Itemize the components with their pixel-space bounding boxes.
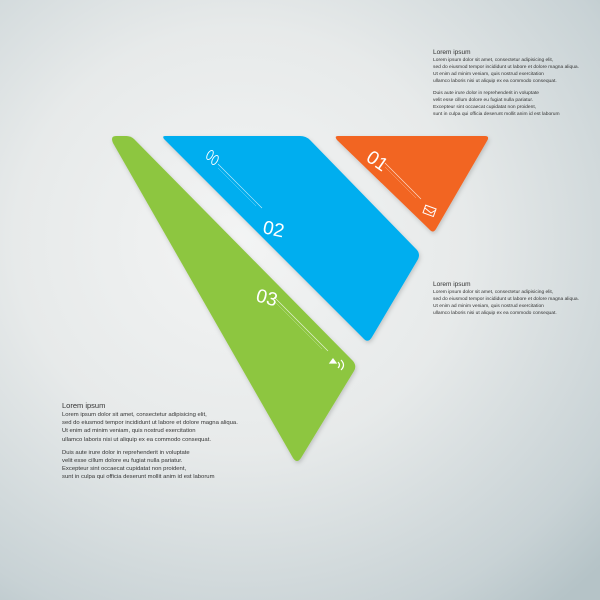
icon: footprints [205,149,220,166]
text block: bottom left: Ut enim ad minim veniam, quis nostrud exercitation [62,428,196,434]
piece 02: blue: 02 [261,217,286,242]
text block: bottom left: Duis aute irure dolor in reprehenderit in voluptate [62,450,190,456]
text block: bottom left: Lorem ipsum [62,401,105,410]
text block: bottom left: ullamco laboris nisi ut aliquip ex ea commodo consequat. [62,437,211,443]
text block: top right [433,49,579,117]
text block: top right: Ut enim ad minim veniam, quis nostrud exercitation [433,72,544,77]
piece 03: green [112,136,355,461]
text block: bottom left: velit esse cillum dolore eu fugiat nulla pariatur. [62,458,182,464]
text block: top right: sunt in culpa qui officia deserunt mollit anim id est laborum [433,112,560,117]
text block: top right: Duis aute irure dolor in reprehenderit in voluptate [433,91,539,96]
text block: bottom left: sunt in culpa qui officia deserunt mollit anim id est laborum [62,474,214,480]
text block: top right: Lorem ipsum dolor sit amet, consectetur adipisicing elit, [433,58,553,63]
text block: bottom left: Excepteur sint occaecat cupidatat non proident, [62,466,186,472]
piece 01: orange: 01 [362,147,391,176]
text block: bottom left: sed do eiusmod tempor incididunt ut labore et dolore magna aliqua. [62,420,238,426]
piece 03: green: 03 [254,286,280,311]
text block: middle right [433,281,579,316]
text block: top right: Excepteur sint occaecat cupidatat non proident, [433,105,536,110]
text block: bottom left: Lorem ipsum dolor sit amet, consectetur adipisicing elit, [62,412,207,418]
piece 02: blue [163,136,419,341]
text block: top right: sed do eiusmod tempor incididunt ut labore et dolore magna aliqua. [433,65,579,70]
text block: middle right: sed do eiusmod tempor incididunt ut labore et dolore magna aliqua. [433,297,579,302]
text block: top right: ullamco laboris nisi ut aliquip ex ea commodo consequat. [433,79,557,84]
icon: envelope [423,205,436,216]
text block: bottom left [62,401,238,480]
icon: speaker [330,359,344,370]
text block: middle right: ullamco laboris nisi ut aliquip ex ea commodo consequat. [433,311,557,316]
text block: middle right: Lorem ipsum dolor sit amet, consectetur adipisicing elit, [433,290,553,295]
text block: middle right: Lorem ipsum [433,281,471,288]
piece 01: orange [336,136,488,232]
text block: top right: Lorem ipsum [433,49,471,56]
text block: top right: velit esse cillum dolore eu fugiat nulla pariatur. [433,98,533,103]
text block: middle right: Ut enim ad minim veniam, quis nostrud exercitation [433,304,544,309]
